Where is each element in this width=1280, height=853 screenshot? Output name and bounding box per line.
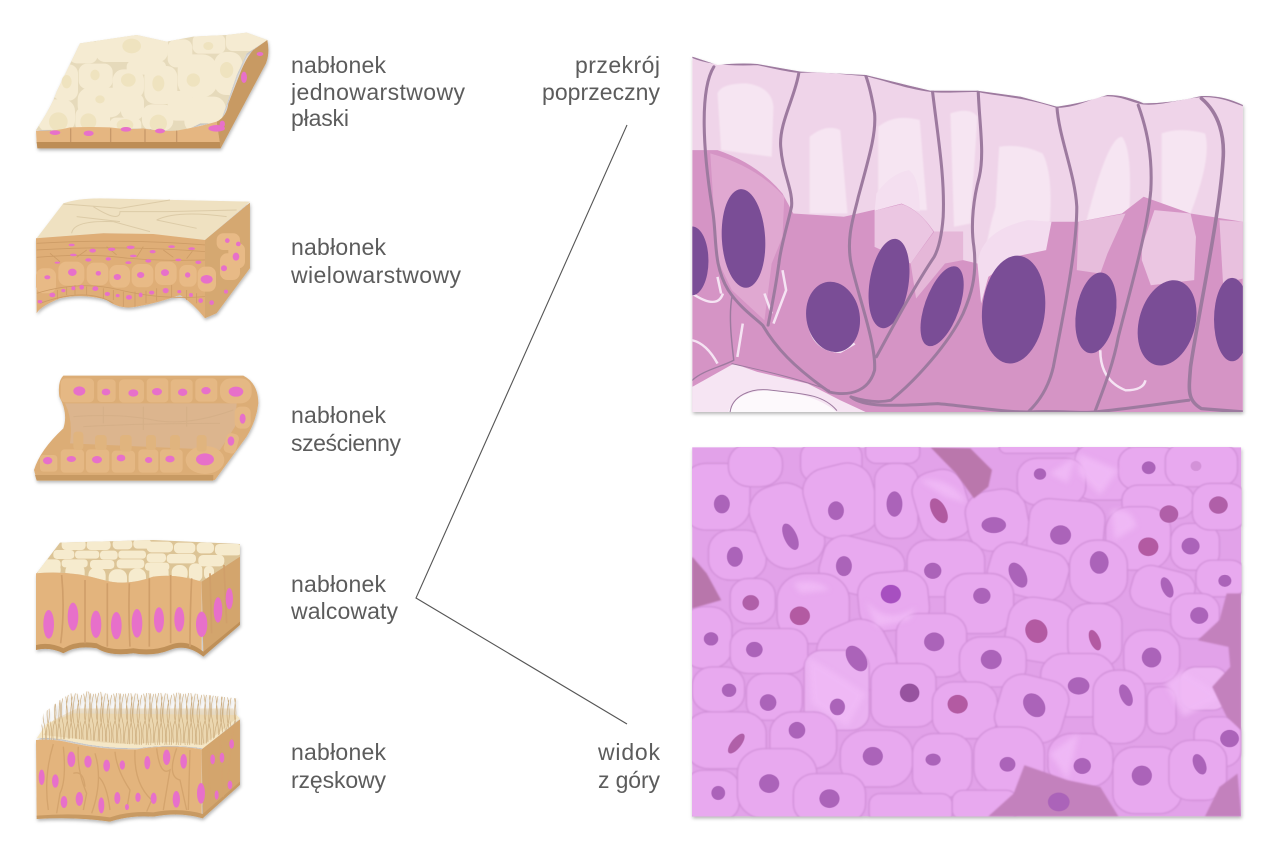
label: top view xyxy=(597,739,660,793)
highlights xyxy=(793,453,1223,780)
label: columnar: walcowaty xyxy=(290,598,398,624)
cytoplasm lighter overlays xyxy=(710,153,784,320)
label: cuboidal xyxy=(291,402,402,456)
illustration: simple squamous epithelium block xyxy=(36,31,268,148)
cytoplasm dark lower layer xyxy=(692,150,1243,414)
dark tissue patches xyxy=(692,447,1241,816)
light vacuole areas xyxy=(717,83,1207,257)
label: stratified: wielowarstwowy xyxy=(290,262,462,288)
illustration: cuboidal epithelium tube xyxy=(34,376,258,481)
label: simple squamous xyxy=(290,52,466,131)
illustration: stratified epithelium block xyxy=(36,198,250,318)
label: columnar: nabłonek xyxy=(291,571,386,597)
label: columnar xyxy=(290,571,398,624)
cell membranes xyxy=(704,67,875,394)
label: top view: widok xyxy=(597,739,660,765)
label: simple squamous: płaski xyxy=(291,105,349,131)
label: cross-section xyxy=(542,52,660,105)
label: cuboidal: nabłonek xyxy=(291,402,386,428)
illustration: ciliated epithelium block xyxy=(36,690,240,822)
nuclei xyxy=(676,188,1250,371)
label: ciliated xyxy=(291,739,386,793)
white gaps xyxy=(692,270,1145,390)
label: cross-section: przekrój xyxy=(575,52,660,78)
cells xyxy=(681,437,1247,824)
label: ciliated: rzęskowy xyxy=(291,767,386,793)
panel: cross-section micrograph xyxy=(676,57,1250,414)
label: stratified: nabłonek xyxy=(291,234,386,260)
label: cuboidal: sześcienny xyxy=(291,430,402,456)
panel: top-view micrograph xyxy=(681,437,1247,824)
label: simple squamous: jednowarstwowy xyxy=(290,79,466,105)
label: stratified xyxy=(290,234,462,288)
label: ciliated: nabłonek xyxy=(291,739,386,765)
nuclei xyxy=(704,461,1239,811)
connector lines xyxy=(416,125,627,724)
illustration: columnar epithelium block xyxy=(36,539,242,657)
label: top view: z góry xyxy=(598,767,660,793)
label: cross-section: poprzeczny xyxy=(542,79,660,105)
label: simple squamous: nabłonek xyxy=(291,52,386,78)
